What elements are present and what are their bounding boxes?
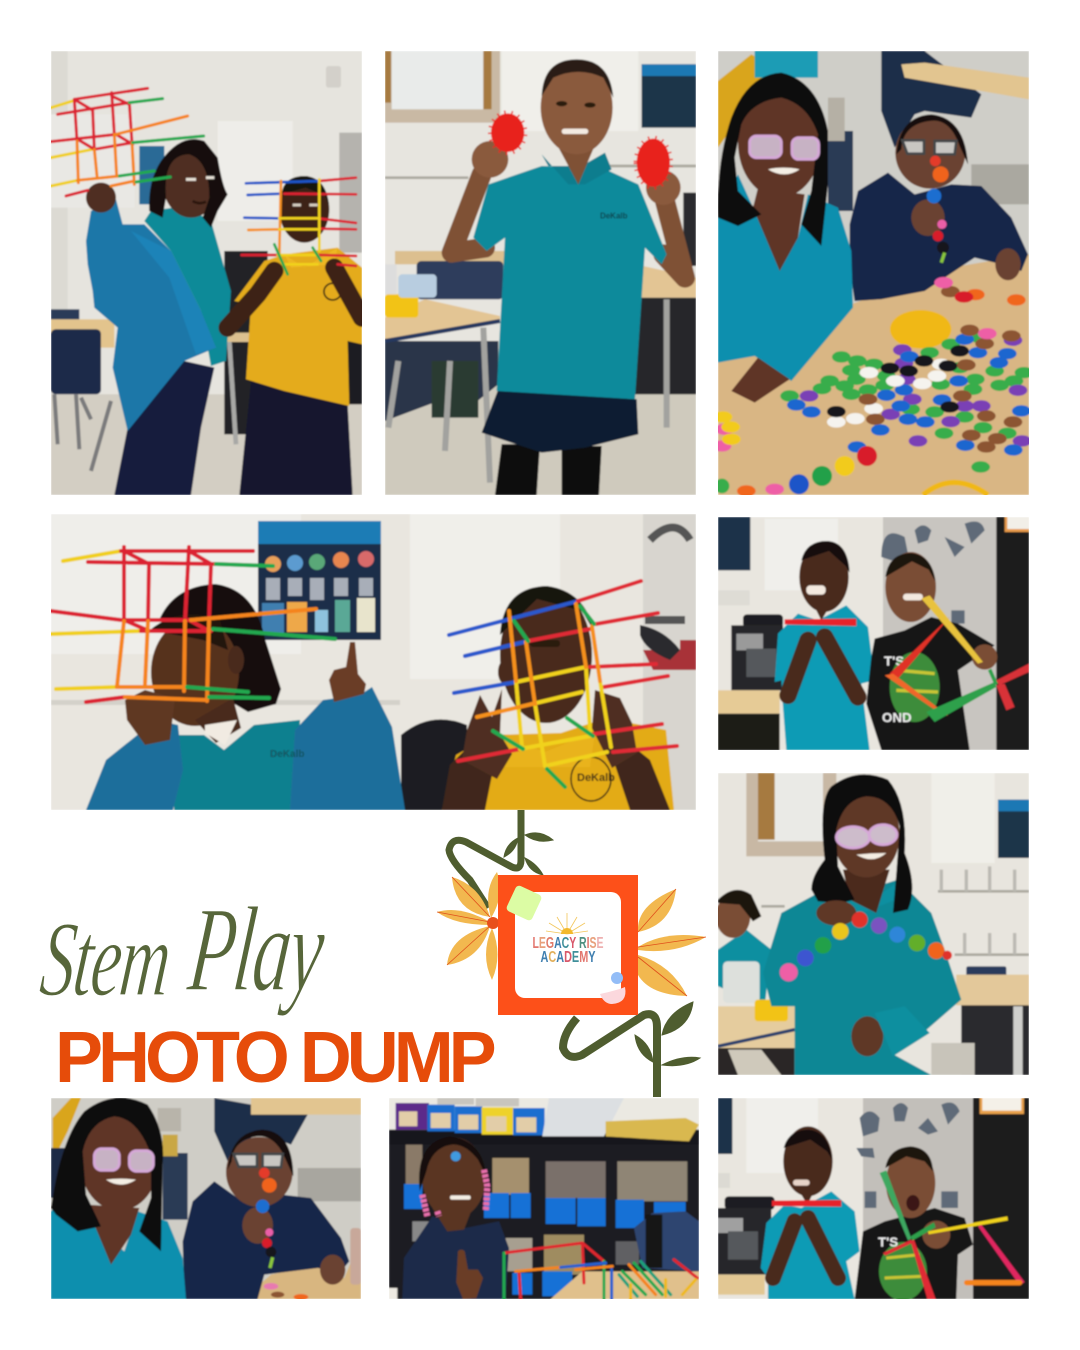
girl: head and braids bbox=[833, 792, 900, 877]
decoration: right flower petals bbox=[638, 889, 706, 996]
logo text: Legacy Rise Academy: ACADEMY bbox=[540, 949, 596, 966]
background child bbox=[718, 930, 771, 1006]
shirt logo: DeKalb bbox=[577, 772, 615, 784]
right student: head bbox=[500, 587, 592, 723]
decoration: left flower petals bbox=[437, 872, 500, 980]
icon: sun rays bbox=[546, 913, 588, 934]
left student: shirt and jacket bbox=[174, 720, 300, 810]
stick shape bbox=[880, 1170, 911, 1240]
photo: two boys, one surprised with stick shape bbox=[718, 1098, 1029, 1301]
stacked paper bbox=[542, 1098, 624, 1136]
right stick cage bbox=[242, 178, 356, 274]
table bbox=[243, 1238, 361, 1299]
bottle and pieces bbox=[350, 1228, 361, 1285]
classroom poster bbox=[258, 521, 381, 640]
neck and head bbox=[558, 148, 594, 186]
girl: head bbox=[422, 1137, 486, 1219]
flower pieces on the table bbox=[713, 277, 1033, 497]
shirt text: T'S bbox=[878, 1234, 898, 1249]
left student: neck and white tee bbox=[195, 698, 241, 743]
heading: PHOTO DUMP: PHOTO DUMP bbox=[55, 1018, 495, 1098]
girl: shirt bbox=[718, 174, 853, 381]
photo: girl with rainbow flower chain bbox=[716, 773, 1029, 1075]
left student: trousers bbox=[114, 361, 214, 495]
blue bins bbox=[404, 1184, 686, 1296]
right boy: shirt bbox=[866, 617, 995, 750]
right student: arms bbox=[228, 268, 362, 328]
photo: girl and boy at table with flower pieces bbox=[713, 51, 1033, 497]
sticker: blue dot bbox=[611, 972, 623, 984]
red pieces bbox=[491, 113, 670, 187]
right boy: head bbox=[885, 552, 936, 622]
stick structure bbox=[504, 1243, 697, 1299]
right student: shirt bbox=[442, 718, 674, 810]
sticker: green bbox=[505, 884, 543, 922]
right student: polo bbox=[234, 248, 362, 406]
girl: neck bbox=[843, 870, 890, 913]
boy: head bbox=[895, 117, 965, 189]
stick shape bbox=[890, 617, 950, 679]
teal polo bbox=[473, 166, 667, 399]
right boy: head bbox=[886, 1148, 935, 1218]
pink beads bbox=[422, 1170, 487, 1216]
left boy: arms bbox=[788, 637, 858, 697]
girl: shirt bbox=[763, 880, 961, 1075]
legs bbox=[495, 444, 602, 495]
photo: girl at bookshelf with sticks bbox=[389, 1098, 699, 1299]
boy: jacket bbox=[850, 173, 1028, 301]
left student: shirt bbox=[144, 206, 231, 366]
chair bbox=[634, 1211, 699, 1271]
logo card bbox=[498, 875, 638, 1015]
shirt logo text: DeKalb bbox=[270, 749, 304, 760]
decoration: bottom vine bbox=[563, 1002, 700, 1097]
sticker: pink half circle bbox=[600, 987, 625, 1004]
girl: raised hand bbox=[456, 1250, 483, 1299]
right student: trousers bbox=[239, 381, 353, 495]
yellow disc bbox=[890, 310, 951, 349]
books bbox=[406, 1145, 687, 1275]
logo text: Legacy Rise Academy: LEGACY RISE bbox=[532, 935, 604, 952]
arms bbox=[452, 174, 685, 278]
photo: two boys with stick shapes: OND bbox=[882, 710, 912, 725]
table bbox=[551, 1271, 699, 1299]
table bbox=[718, 254, 1029, 495]
left boy: shirt bbox=[761, 1191, 860, 1299]
top bins bbox=[396, 1098, 545, 1135]
photo: girl and boy smiling bbox=[51, 1098, 361, 1300]
left student: hands bbox=[125, 690, 175, 745]
left stick cube bbox=[51, 547, 335, 702]
girl: head and braids bbox=[736, 96, 820, 194]
left student: eyes and mouth bbox=[186, 178, 214, 179]
envelopes bbox=[606, 1118, 699, 1141]
right boy: shirt bbox=[855, 1208, 973, 1299]
shirt logo text: DeKalb bbox=[600, 212, 628, 221]
left boy: shirt bbox=[775, 605, 875, 750]
decoration: top vine bbox=[449, 810, 553, 908]
red sticks bbox=[772, 1200, 841, 1207]
sticker bbox=[451, 1151, 461, 1161]
girl: shirt bbox=[402, 1216, 509, 1299]
left student: head bbox=[164, 153, 211, 219]
right student: hands bbox=[462, 689, 512, 779]
left boy: arms bbox=[773, 1218, 838, 1278]
rainbow flower chain bbox=[780, 912, 952, 981]
girl: glasses and smile bbox=[836, 827, 870, 848]
fingerprint print bbox=[890, 652, 940, 722]
photo: close-up of students behind stick cubes bbox=[51, 514, 696, 810]
girl: head and braids bbox=[80, 1112, 159, 1211]
photo: two boys with stick shapes bbox=[718, 517, 1029, 750]
photo: two students holding stick cubes bbox=[51, 51, 362, 495]
shirt logo bbox=[571, 757, 615, 801]
left stick cube bbox=[51, 88, 204, 196]
left boy: head bbox=[783, 1126, 833, 1196]
boy: flower toy bbox=[256, 1168, 277, 1268]
right student: head bbox=[279, 176, 329, 243]
left student: hair and head bbox=[160, 584, 281, 712]
left boy: head bbox=[799, 542, 849, 612]
boy: head bbox=[226, 1137, 293, 1207]
girl: glasses and smile bbox=[94, 1149, 119, 1170]
script title: Stem Play bbox=[36, 881, 332, 1019]
boy: jacket bbox=[183, 1181, 349, 1299]
flower chain bbox=[715, 446, 877, 494]
script title: Stem Play: Stem bbox=[36, 899, 175, 1019]
logo text: Legacy Rise Academy bbox=[532, 935, 604, 966]
girl: hands bbox=[816, 900, 856, 926]
boy: flower toy bbox=[927, 156, 949, 263]
script title: Stem Play: Play bbox=[182, 881, 332, 1016]
shirt text: T'S bbox=[884, 653, 904, 668]
red sticks bbox=[785, 619, 856, 626]
left student: jacket bbox=[86, 199, 216, 431]
photo: girl holding red pieces bbox=[385, 51, 696, 495]
skirt bbox=[482, 389, 638, 453]
girl: glasses and smile bbox=[750, 136, 781, 158]
girl: shirt bbox=[51, 1185, 186, 1299]
right stick cage bbox=[449, 581, 677, 787]
